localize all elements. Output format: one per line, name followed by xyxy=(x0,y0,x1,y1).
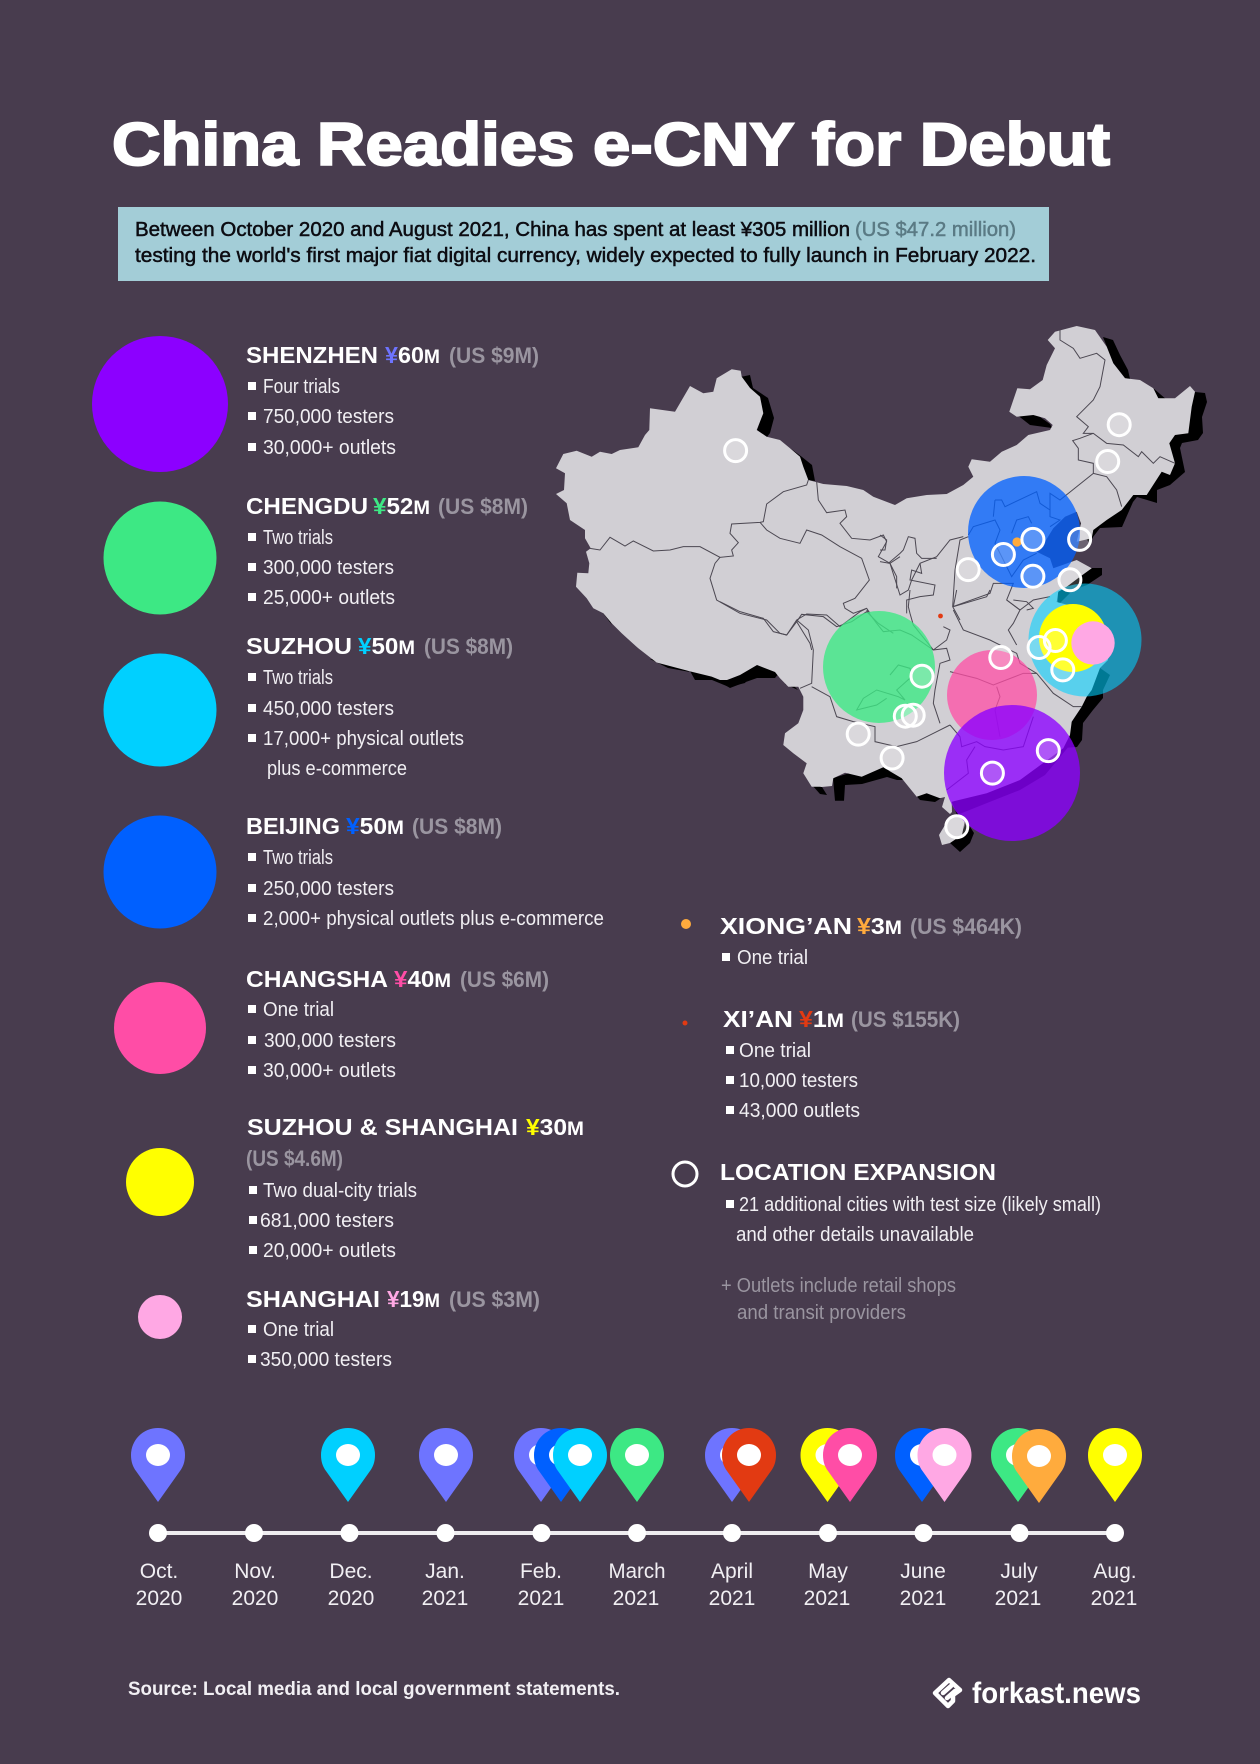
panel: Changsha: ¥40M xyxy=(394,966,451,992)
map shadow xyxy=(603,337,1207,852)
trial circles xyxy=(823,476,1142,841)
panel: Chengdu xyxy=(104,493,528,614)
timeline labels: Nov. xyxy=(234,1560,276,1583)
panel: Shenzhen: 750,000 testers xyxy=(263,406,394,428)
intro banner: Between October 2020 and August 2021, China has spent at least ¥305 million xyxy=(135,219,850,241)
panel: Changsha: CHANGSHA xyxy=(246,966,388,992)
panel: Xiong'an: (US $464K) xyxy=(910,914,1022,939)
panel: Chengdu: (US $8M) xyxy=(438,494,528,519)
panel: Beijing xyxy=(104,813,604,930)
panel: Shanghai: ¥19M xyxy=(387,1286,440,1312)
panel: Suzhou: Two trials xyxy=(263,667,333,689)
panel: Xi'an: 10,000 testers xyxy=(739,1070,858,1092)
panel: Chengdu: 300,000 testers xyxy=(263,557,394,579)
panel: Beijing: 2,000+ physical outlets plus e-commerce xyxy=(263,908,604,930)
panel: Suzhou and Shanghai: SUZHOU & SHANGHAI xyxy=(247,1114,518,1140)
timeline pins xyxy=(131,1428,1142,1503)
timeline labels: 2021 xyxy=(900,1587,946,1610)
timeline labels: 2021 xyxy=(518,1587,564,1610)
panel: Xiong'an xyxy=(681,913,1022,969)
panel: Changsha: 30,000+ outlets xyxy=(263,1060,396,1082)
panel: Xi'an: 43,000 outlets xyxy=(739,1100,860,1122)
panel: Beijing: BEIJING xyxy=(246,813,340,839)
timeline labels: 2021 xyxy=(1091,1587,1137,1610)
panel: Shenzhen: ¥60M xyxy=(385,342,440,368)
timeline labels: Oct. xyxy=(140,1560,178,1583)
panel: Beijing: 250,000 testers xyxy=(263,878,394,900)
panel: Shenzhen: Four trials xyxy=(263,376,340,398)
panel: Shenzhen: (US $9M) xyxy=(449,343,539,368)
note on outlets xyxy=(721,1275,956,1324)
panel: Chengdu: ¥52M xyxy=(373,493,430,519)
panel: Xi'an: ¥1M xyxy=(799,1006,844,1032)
panel: location expansion: and other details unavailable xyxy=(736,1224,974,1246)
timeline labels: 2020 xyxy=(328,1587,374,1610)
panel: Suzhou and Shanghai: 681,000 testers xyxy=(260,1210,394,1232)
intro banner xyxy=(118,207,1049,281)
panel: Suzhou xyxy=(104,633,513,780)
timeline labels: July xyxy=(1000,1560,1038,1583)
panel: Xiong'an: One trial xyxy=(737,947,808,969)
timeline labels: June xyxy=(900,1560,946,1583)
timeline axis xyxy=(149,1524,1124,1542)
timeline labels: Feb. xyxy=(520,1560,562,1583)
panel: Xi'an: One trial xyxy=(739,1040,811,1062)
panel: Chengdu: 25,000+ outlets xyxy=(263,587,395,609)
location expansion rings xyxy=(725,414,1130,838)
map land xyxy=(556,326,1195,845)
timeline labels: 2021 xyxy=(995,1587,1041,1610)
panel: Changsha: 300,000 testers xyxy=(264,1030,396,1052)
panel: Suzhou and Shanghai xyxy=(126,1114,584,1262)
panel: Xi'an xyxy=(682,1006,960,1122)
panel: Suzhou and Shanghai: (US $4.6M) xyxy=(246,1146,343,1171)
map of China with trial circles xyxy=(556,326,1207,852)
timeline labels: Jan. xyxy=(425,1560,465,1583)
timeline labels: 2020 xyxy=(136,1587,182,1610)
timeline labels: Aug. xyxy=(1093,1560,1137,1583)
panel: Shanghai: One trial xyxy=(263,1319,334,1341)
forkast.news logo: forkast.news xyxy=(972,1677,1141,1710)
panel: location expansion: 21 additional cities with test size (likely small) xyxy=(739,1194,1101,1216)
timeline labels: April xyxy=(711,1560,753,1583)
panel: Suzhou: 17,000+ physical outlets xyxy=(263,728,464,750)
panel: Shanghai xyxy=(138,1286,540,1371)
panel: Suzhou: ¥50M xyxy=(358,633,415,659)
source note: Source: Local media and local government statements. xyxy=(128,1679,620,1700)
panel: Xi'an: (US $155K) xyxy=(851,1007,960,1032)
panel: Shanghai: SHANGHAI xyxy=(246,1286,380,1312)
panel: Xiong'an: ¥3M xyxy=(857,913,902,939)
panel: Suzhou: SUZHOU xyxy=(246,633,352,659)
timeline labels: 2021 xyxy=(422,1587,468,1610)
note on outlets: + Outlets include retail shops xyxy=(721,1275,956,1297)
panel: Suzhou and Shanghai: 20,000+ outlets xyxy=(263,1240,396,1262)
intro banner: testing the world's first major fiat digital currency, widely expected to fully launch in February 2022. xyxy=(135,245,1036,267)
panel: Shenzhen: SHENZHEN xyxy=(246,342,378,368)
panel: location expansion xyxy=(673,1159,1101,1246)
panel: Shanghai: (US $3M) xyxy=(449,1287,540,1312)
panel: Changsha xyxy=(114,966,549,1082)
panel: Beijing: ¥50M xyxy=(346,813,404,839)
panel: Shanghai: 350,000 testers xyxy=(260,1349,392,1371)
panel: Chengdu: CHENGDU xyxy=(246,493,368,519)
panel: location expansion: LOCATION EXPANSION xyxy=(720,1159,996,1185)
panel: Xi'an: XI’AN xyxy=(723,1006,793,1032)
timeline labels: 2021 xyxy=(709,1587,755,1610)
timeline labels: March xyxy=(608,1560,666,1583)
panel: Suzhou and Shanghai: Two dual-city trials xyxy=(263,1180,417,1202)
panel: Beijing: Two trials xyxy=(263,847,333,869)
intro banner: (US $47.2 million) xyxy=(855,219,1016,241)
panel: Beijing: (US $8M) xyxy=(412,814,502,839)
panel: Changsha: One trial xyxy=(263,999,334,1021)
timeline labels: 2020 xyxy=(232,1587,278,1610)
timeline labels: Dec. xyxy=(329,1560,373,1583)
panel: Changsha: (US $6M) xyxy=(460,967,549,992)
panel: Suzhou: 450,000 testers xyxy=(263,698,394,720)
province borders xyxy=(590,330,1175,790)
panel: Shenzhen xyxy=(92,336,539,472)
panel: Suzhou: (US $8M) xyxy=(424,634,513,659)
panel: Chengdu: Two trials xyxy=(263,527,333,549)
panel: Xiong'an: XIONG’AN xyxy=(720,913,852,939)
timeline labels xyxy=(136,1560,1137,1610)
timeline labels: 2021 xyxy=(613,1587,659,1610)
panel: Suzhou and Shanghai: ¥30M xyxy=(526,1114,584,1140)
timeline labels: May xyxy=(808,1560,848,1583)
timeline labels: 2021 xyxy=(804,1587,850,1610)
panel: Suzhou: plus e-commerce xyxy=(267,758,407,780)
title: China Readies e-CNY for Debut xyxy=(112,111,1110,178)
panel: Shenzhen: 30,000+ outlets xyxy=(263,437,396,459)
note on outlets: and transit providers xyxy=(737,1302,906,1324)
